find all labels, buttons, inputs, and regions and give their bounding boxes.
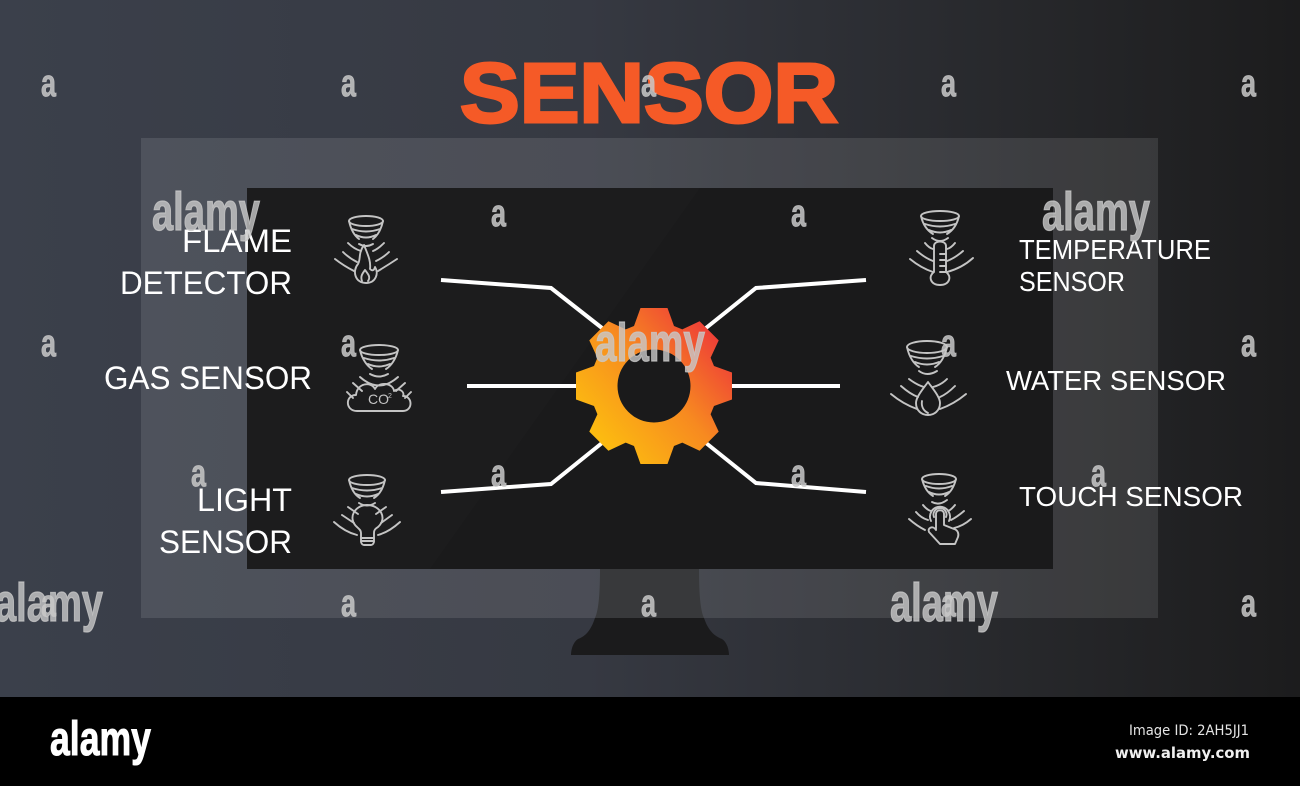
watermark: alamy large: alamy [890, 573, 998, 633]
watermark: small a marks: a [1241, 63, 1257, 105]
label: light sensor [159, 482, 292, 560]
icon: gas sensor [347, 345, 411, 411]
label: gas sensor: GAS SENSOR [104, 360, 312, 396]
watermark: alamy large: alamy [152, 182, 260, 242]
watermark: small a marks: a [341, 323, 357, 365]
label: temperature sensor: TEMPERATURE [1019, 234, 1211, 265]
watermark: small a marks: a [1241, 583, 1257, 625]
icon: gas sensor: CO [368, 391, 389, 407]
watermark: small a marks: a [41, 63, 57, 105]
watermark: alamy large: alamy [1042, 182, 1150, 242]
label: light sensor: SENSOR [159, 524, 292, 560]
label: flame detector [120, 223, 292, 301]
label: light sensor: LIGHT [197, 482, 292, 518]
watermark: alamy large: alamy [595, 313, 705, 373]
footer bar: alamy [50, 713, 151, 766]
watermark: small a marks [41, 63, 1257, 625]
watermark: small a marks: a [1091, 453, 1107, 495]
watermark: small a marks: a [941, 323, 957, 365]
watermark: small a marks: a [1241, 323, 1257, 365]
watermark: small a marks: a [491, 453, 507, 495]
watermark: small a marks: a [41, 323, 57, 365]
watermark: small a marks: a [341, 583, 357, 625]
watermark: alamy large [0, 182, 1150, 633]
watermark: small a marks: a [491, 193, 507, 235]
watermark: small a marks: a [641, 63, 657, 105]
icon: temperature sensor [910, 211, 973, 285]
label: water sensor: WATER SENSOR [1006, 365, 1226, 396]
icon: touch sensor [909, 474, 971, 544]
watermark: small a marks: a [791, 193, 807, 235]
footer bar: Image ID: 2AH5JJ1 [1129, 723, 1249, 739]
icon: light sensor [334, 475, 400, 545]
icon: water sensor [891, 341, 966, 415]
watermark: small a marks: a [191, 453, 207, 495]
footer bar [0, 697, 1300, 786]
watermark: small a marks: a [341, 63, 357, 105]
watermark: small a marks: a [941, 583, 957, 625]
watermark: small a marks: a [791, 453, 807, 495]
gear icon [576, 308, 732, 464]
label: touch sensor: TOUCH SENSOR [1019, 481, 1243, 512]
watermark: small a marks: a [41, 583, 57, 625]
connector lines [441, 280, 866, 492]
watermark: small a marks: a [641, 583, 657, 625]
watermark: small a marks: a [941, 63, 957, 105]
icon: flame detector [335, 216, 397, 283]
label: flame detector: FLAME [182, 223, 292, 259]
label: temperature sensor [1019, 234, 1211, 297]
label: temperature sensor: SENSOR [1019, 266, 1125, 297]
monitor [141, 138, 1158, 655]
label: flame detector: DETECTOR [120, 265, 292, 301]
icon: gas sensor: 2 [388, 393, 392, 400]
title: SENSOR [460, 46, 838, 140]
footer bar: www.alamy.com [1115, 744, 1250, 762]
